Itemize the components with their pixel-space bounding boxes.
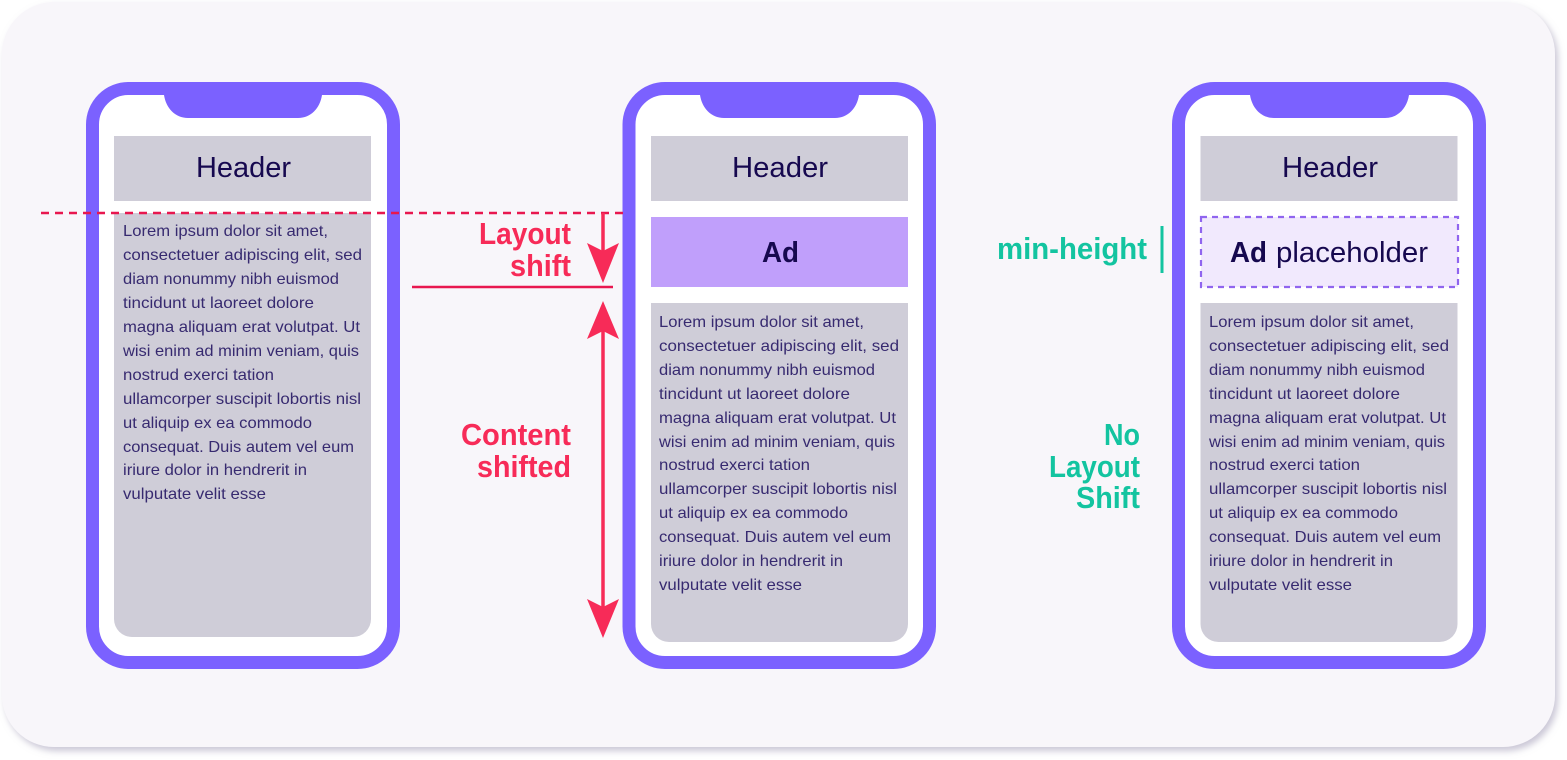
content block: vulputate velit esse <box>1209 577 1352 594</box>
min-height bracket <box>1160 226 1164 273</box>
content block: diam nonummy nibh euismod <box>659 362 875 379</box>
content block: tincidunt ut laoreet dolore <box>659 386 850 403</box>
content block: consequat. Duis autem vel eum <box>659 529 891 546</box>
content block: tincidunt ut laoreet dolore <box>1209 386 1400 403</box>
label: no layout shift: No <box>1104 417 1140 452</box>
phone 1: before ad loads <box>92 88 394 662</box>
content block: diam nonummy nibh euismod <box>1209 362 1425 379</box>
label: no layout shift: Layout <box>1049 449 1140 484</box>
phone frame <box>1178 88 1480 662</box>
content block: Lorem ipsum dolor sit amet, <box>123 223 328 240</box>
header block <box>1200 136 1458 201</box>
content block: tincidunt ut laoreet dolore <box>123 295 314 312</box>
header block <box>114 136 371 201</box>
content block: diam nonummy nibh euismod <box>123 271 339 288</box>
content block: iriure dolor in hendrerit in <box>1209 553 1393 570</box>
content block <box>651 303 908 642</box>
phone frame <box>92 88 394 662</box>
header block <box>651 136 908 201</box>
label: layout shift: Layout <box>479 216 571 251</box>
ad block <box>651 217 908 287</box>
dashed reference line <box>41 212 623 214</box>
header block: Header <box>732 152 828 184</box>
content block: consectetuer adipiscing elit, sed <box>123 247 362 264</box>
content block: nostrud exerci tation <box>123 367 274 384</box>
content block: ullamcorper suscipit lobortis nisl <box>1209 481 1447 498</box>
content block: ullamcorper suscipit lobortis nisl <box>123 391 361 408</box>
phone notch <box>1250 95 1409 118</box>
phone frame <box>629 88 930 662</box>
content block: wisi enim ad minim veniam, quis <box>1208 434 1445 451</box>
label: content shifted <box>461 417 571 484</box>
content block: vulputate velit esse <box>659 577 802 594</box>
content block: ut aliquip ex ea commodo <box>123 415 312 432</box>
content block: wisi enim ad minim veniam, quis <box>122 343 359 360</box>
label: no layout shift: Shift <box>1076 480 1140 515</box>
phone 3: ad placeholder, no shift <box>1178 88 1480 662</box>
content block: magna aliquam erat volutpat. Ut <box>123 319 361 336</box>
header block: Header <box>1282 152 1378 184</box>
content block: consectetuer adipiscing elit, sed <box>659 338 899 355</box>
label: layout shift: shift <box>510 248 571 283</box>
content block: magna aliquam erat volutpat. Ut <box>659 410 897 427</box>
content block: ut aliquip ex ea commodo <box>1209 505 1398 522</box>
content block: iriure dolor in hendrerit in <box>123 462 307 479</box>
content block <box>1200 303 1458 642</box>
phone 2: ad loaded, content shifted <box>629 88 930 662</box>
ad block: Ad <box>762 237 799 269</box>
content block: ullamcorper suscipit lobortis nisl <box>659 481 897 498</box>
ad placeholder block: placeholder <box>1276 237 1428 269</box>
label: content shifted: shifted <box>477 449 571 484</box>
phone notch <box>164 95 322 118</box>
content block: vulputate velit esse <box>123 486 266 503</box>
content block <box>114 213 371 637</box>
content block: wisi enim ad minim veniam, quis <box>658 434 895 451</box>
content block: nostrud exerci tation <box>1209 457 1360 474</box>
content block: consequat. Duis autem vel eum <box>123 439 354 456</box>
header block: Header <box>196 152 291 184</box>
content block: ut aliquip ex ea commodo <box>659 505 848 522</box>
content block: Lorem ipsum dolor sit amet, <box>1209 314 1414 331</box>
ad placeholder block: Ad <box>1230 237 1267 269</box>
content block: consectetuer adipiscing elit, sed <box>1209 338 1449 355</box>
label: min-height: min-height <box>997 231 1147 266</box>
ad placeholder block <box>1201 217 1458 287</box>
phone notch <box>700 95 859 118</box>
content block: iriure dolor in hendrerit in <box>659 553 843 570</box>
label: content shifted: Content <box>461 417 571 452</box>
content block: nostrud exerci tation <box>659 457 810 474</box>
arrow: content shifted <box>587 301 619 638</box>
content block: Lorem ipsum dolor sit amet, <box>659 314 864 331</box>
content block: consequat. Duis autem vel eum <box>1209 529 1441 546</box>
content block: magna aliquam erat volutpat. Ut <box>1209 410 1447 427</box>
label: no layout shift <box>1049 417 1140 515</box>
solid shift line <box>412 286 613 288</box>
arrow: layout shift <box>587 213 619 283</box>
label: layout shift <box>479 216 571 283</box>
